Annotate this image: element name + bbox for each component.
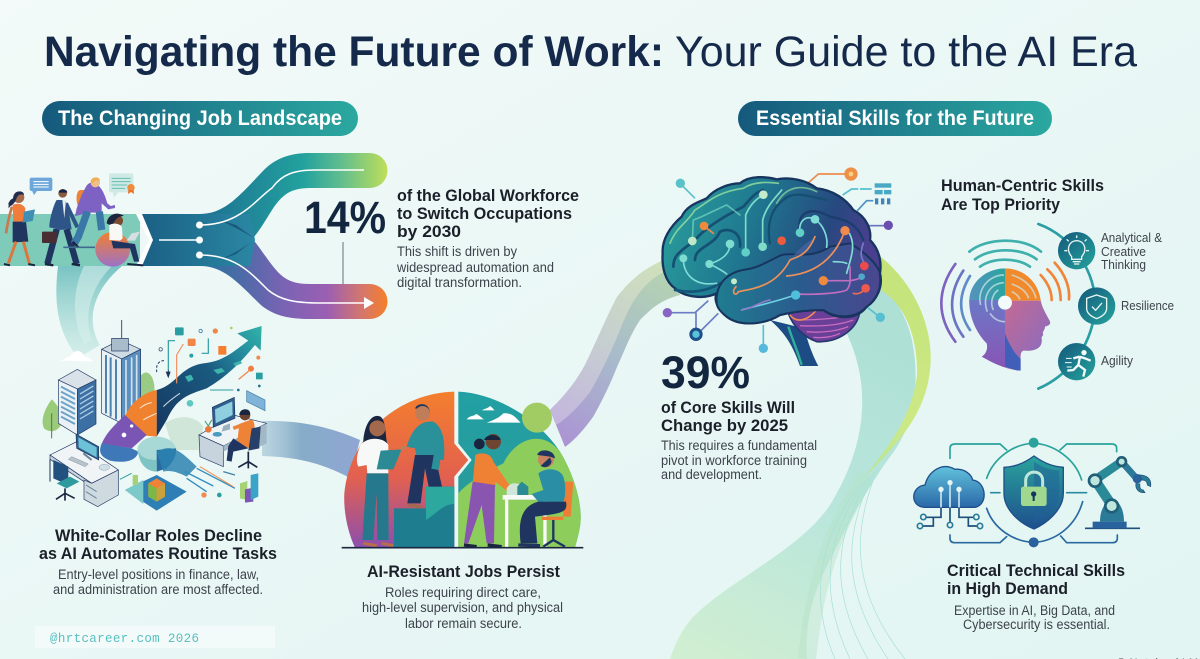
icon: cloud network [914,467,984,529]
cerebrum [662,177,881,323]
text: AI-resistant jobs persist: AI-Resistant Jobs Persist [367,562,560,581]
outer circuit nodes [663,167,893,353]
left desk with monitor and chair [50,434,118,507]
icon: certificate card [109,173,135,197]
woman caregiver [464,434,512,547]
floating data icons [157,327,265,411]
pale teal connecting ribbon [56,266,122,358]
text: critical technical skills: Cybersecurity is essential. [963,617,1110,632]
text: critical technical skills: Critical Technical Skills [947,561,1125,580]
circuit traces [683,190,866,310]
text: white-collar roles decline: White-Collar Roles Decline [55,526,262,545]
skill labels: Thinking [1101,257,1146,272]
spine arc [1038,224,1095,389]
green hill [458,439,581,548]
short tower [58,369,96,435]
stat: 14 percent: digital transformation. [397,275,522,290]
circuit nodes [679,190,870,300]
heading: human-centric skills: Human-Centric Skills [941,176,1104,195]
woman with tablet [4,191,35,265]
heading pill: Essential Skills for the Future: Essential Skills for the Future [756,107,1034,130]
stat: 14 percent: This shift is driven by [397,244,517,259]
icon: shield check [1078,287,1115,325]
text: critical technical skills [947,561,1125,632]
sound arcs [941,241,1069,342]
text: critical technical skills: Expertise in AI, Big Data, and [954,603,1115,618]
skill labels: Creative [1101,244,1146,259]
stat: 14 percent [304,186,579,290]
cloud and trees [43,351,154,438]
top branch ribbon [200,153,388,240]
office automation illustration [43,320,267,511]
stat: 14 percent: 14% [304,192,386,243]
folds [670,182,863,292]
title: Navigating the Future of Work: [44,28,664,76]
icon: runner [1058,343,1095,380]
watermark [35,626,275,648]
table and seated man [503,450,573,548]
stat: 14 percent: of the Global Workforce [397,186,579,205]
stat: 14 percent: to Switch Occupations [397,204,572,223]
heading pill: The Changing Job Landscape [42,101,358,136]
man on stairs [400,404,444,507]
chevron block [138,214,255,266]
skill labels [1101,230,1174,368]
text: white-collar roles decline: as AI Automates Routine Tasks [39,544,277,563]
stat: 39 percent: 39% [661,347,750,398]
pale blue connecting ribbon [262,421,360,478]
head profile [969,268,1050,371]
stat: 39 percent: Change by 2025 [661,416,788,435]
AI-resistant jobs illustration [342,392,583,548]
stat: 39 percent: and development. [661,467,762,482]
right half circle [458,392,581,548]
watermark: @hrtcareer.com 2026 [50,632,199,646]
skill labels: Resilience [1121,298,1174,313]
temporal lobe [717,243,880,323]
tall tower [102,320,141,423]
stat: 39 percent: This requires a fundamental [661,438,817,453]
stat: 14 percent: by 2030 [397,222,461,241]
data wave and arrow [100,326,262,477]
brain stem [770,320,818,366]
heading: human-centric skills: Are Top Priority [941,195,1061,214]
icon: shield with padlock [1004,456,1063,529]
text: AI-resistant jobs persist: high-level supervision, and physical [362,600,563,615]
purple connecting ribbon [550,260,680,447]
brain illustration [662,167,893,366]
left half circle [344,392,468,548]
flow arrows [159,170,366,303]
cerebellum [788,306,860,342]
connector ring [950,443,1117,543]
teal band under the people [0,214,140,266]
text: AI-resistant jobs persist [362,562,563,631]
title: Your Guide to the AI Era [675,28,1137,76]
skill labels: Analytical & [1101,230,1162,245]
heading pill: Essential Skills for the Future [738,101,1052,136]
bottom branch ribbon [200,239,388,319]
icon: robot arm [1085,457,1151,528]
people walking illustration [4,173,143,267]
green sweeping ribbon behind brain [670,250,931,659]
stat: 39 percent: pivot in workforce training [661,453,807,468]
text: AI-resistant jobs persist: Roles requiring direct care, [385,585,541,600]
block chart cluster [120,467,258,511]
icon: light bulb [1058,232,1095,269]
text: critical technical skills: in High Demand [947,579,1068,598]
right desk with worker [199,397,267,468]
man with backpack [63,177,115,247]
text: white-collar roles decline: Entry-level positions in finance, law, [58,567,259,582]
woman on orange seat with laptop [95,214,143,267]
sun and clouds [467,403,552,433]
text: white-collar roles decline: and administration are most affected. [53,582,263,597]
technical skills illustration [914,438,1151,547]
title [44,28,1137,76]
ground line [342,545,583,550]
heading: human-centric skills [941,176,1104,214]
woman with clipboard [357,416,402,546]
icon: blue speech bubble [30,178,52,195]
steps [394,487,454,548]
stat: 39 percent: of Core Skills Will [661,398,795,417]
skill labels: Agility [1101,353,1133,368]
man with briefcase [42,189,80,265]
text: white-collar roles decline [39,526,277,597]
head with skill icons [941,224,1115,389]
split flow diagram [0,153,388,319]
text: AI-resistant jobs persist: labor remain secure. [405,616,522,631]
heading pill: The Changing Job Landscape: The Changing Job Landscape [58,107,342,130]
stat: 14 percent: widespread automation and [396,260,554,275]
stat: 39 percent [661,347,817,482]
